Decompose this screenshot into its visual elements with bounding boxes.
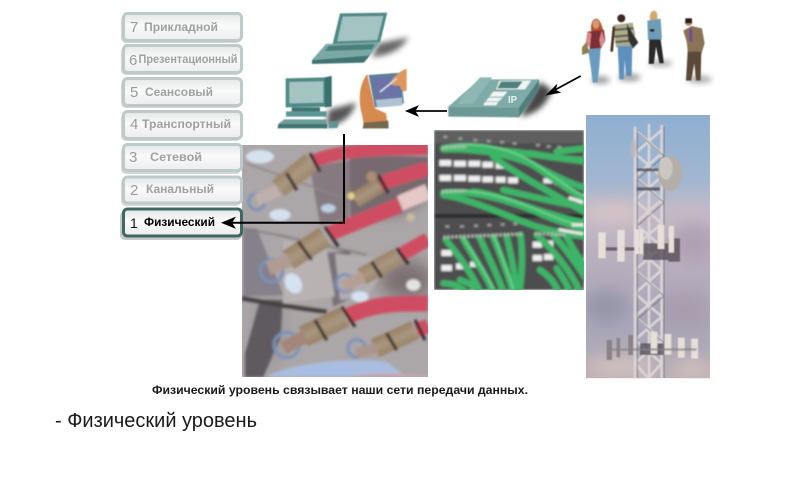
layer 4 button bbox=[121, 112, 242, 141]
layer 2 button: Канальный bbox=[146, 184, 214, 196]
icon: desktop computer bbox=[278, 76, 356, 128]
layer 4 button: 4 bbox=[130, 116, 138, 133]
panel: cable connectors photo bbox=[242, 145, 433, 377]
layer 7 button bbox=[121, 14, 242, 43]
layer 4 button: Транспортный bbox=[142, 119, 231, 131]
layer 5 button bbox=[121, 78, 242, 108]
layer 1 button, highlighted: Физический bbox=[144, 217, 215, 229]
layer 1 button, highlighted bbox=[120, 209, 242, 240]
panel: cell tower photo bbox=[583, 115, 717, 380]
person: man in brown suit bbox=[683, 18, 712, 83]
person: woman on phone bbox=[647, 11, 673, 66]
layer 7 button: Прикладной bbox=[144, 22, 218, 34]
layer 6 button: 6 bbox=[129, 52, 137, 69]
arrow: phone to PDA bbox=[406, 106, 447, 116]
arrow: computer to physical layer bbox=[222, 134, 344, 228]
layer 7 button: 7 bbox=[130, 19, 138, 36]
panel: green patch cables photo bbox=[434, 130, 587, 292]
layer 5 button: Сеансовый bbox=[145, 87, 213, 99]
layer 6 button: Презентационный bbox=[138, 54, 238, 66]
icon: hand holding PDA bbox=[360, 69, 407, 128]
OSI layer stack bbox=[120, 14, 242, 240]
icon: IP phone bbox=[448, 77, 552, 117]
layer 3 button bbox=[121, 144, 242, 174]
person: woman with red hair bbox=[582, 19, 610, 84]
layer 3 button: Сетевой bbox=[150, 152, 202, 164]
layer 3 button: 3 bbox=[129, 149, 137, 166]
caption: Физический уровень связывает наши сети передачи данных. bbox=[152, 383, 528, 397]
icon: laptop bbox=[312, 13, 408, 64]
layer 2 button bbox=[121, 177, 242, 206]
layer 5 button: 5 bbox=[130, 84, 138, 101]
page heading: - Физический уровень bbox=[55, 410, 257, 432]
layer 1 button, highlighted: 1 bbox=[130, 215, 138, 231]
people group bbox=[582, 11, 712, 84]
layer 2 button: 2 bbox=[130, 182, 138, 199]
layer 6 button bbox=[121, 46, 242, 75]
arrow: people to phone bbox=[546, 76, 581, 95]
person: man in striped shirt bbox=[612, 14, 641, 81]
icon: IP phone: IP bbox=[508, 95, 518, 106]
